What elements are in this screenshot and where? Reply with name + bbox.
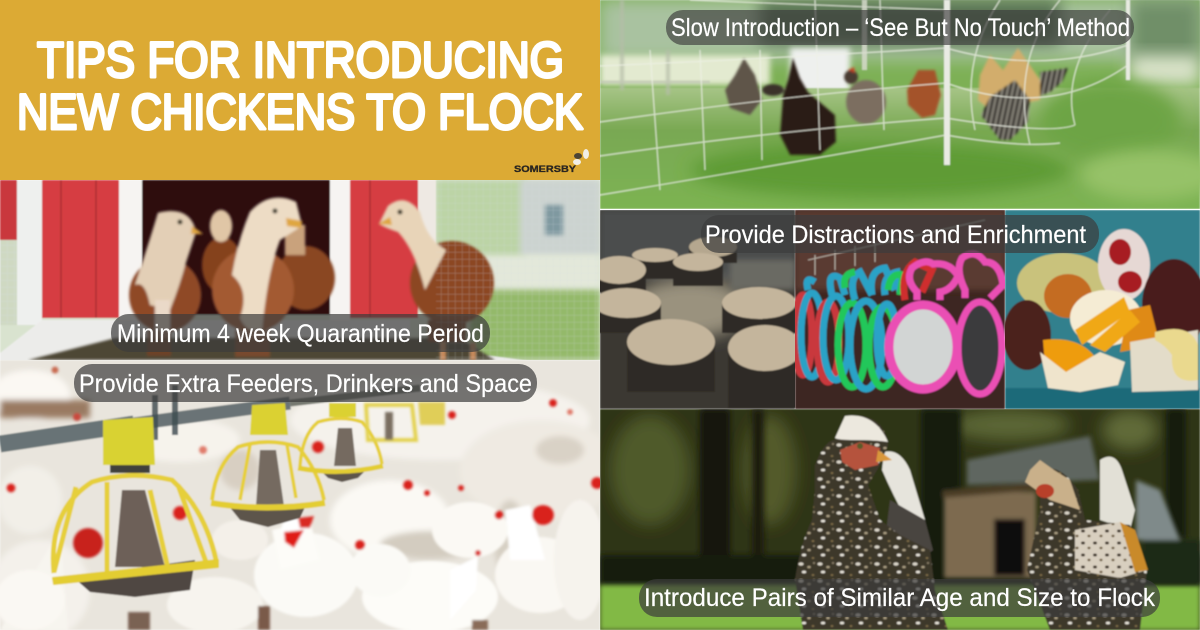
- feeder pipe: [0, 424, 134, 444]
- panel: similar age pairs photo: [600, 409, 1200, 630]
- panel: enrichment stumps photo: [592, 210, 802, 409]
- pink mirrors: [889, 254, 1003, 394]
- feeder small: [298, 403, 383, 482]
- feeder large: [53, 417, 218, 597]
- chick right: [378, 200, 494, 360]
- caption: Quarantine: Minimum 4 week Quarantine Period: [117, 320, 484, 348]
- hen grey brown: [844, 67, 886, 124]
- hen buff pair: [978, 48, 1040, 110]
- hen brown: [907, 70, 941, 118]
- caption: Extra Feeders: Provide Extra Feeders, Drinkers and Space: [79, 370, 532, 398]
- chick back: [202, 210, 242, 293]
- hen black: [780, 58, 836, 155]
- hen striped right: [981, 68, 1068, 140]
- fruit pieces: [1003, 229, 1200, 392]
- caption: Quarantine: [111, 314, 490, 352]
- panel: enrichment mirrors photo: [794, 210, 1005, 409]
- panel: enrichment frozen fruit photo: [1003, 210, 1200, 409]
- chick back right: [277, 225, 335, 310]
- net: [600, 0, 1128, 195]
- birds: [0, 366, 606, 630]
- caption: Distractions and Enrichment: Provide Distractions and Enrichment: [705, 221, 1086, 249]
- pipe bracket: [155, 385, 175, 440]
- stump tops: [592, 237, 802, 371]
- logo: Somersby with bee: SOMERSBY: [514, 164, 576, 174]
- caption: Slow Introduction: Slow Introduction – ‘See But No Touch’ Method: [671, 14, 1130, 42]
- title heading: NEW CHICKENS TO FLOCK: [17, 84, 583, 140]
- blue and green mirrors: [794, 262, 932, 389]
- caption: Similar Age: Introduce Pairs of Similar Age and Size to Flock: [644, 584, 1155, 612]
- title heading: TIPS FOR INTRODUCING: [37, 32, 564, 88]
- stump bodies: [592, 247, 802, 408]
- feeder medium: [211, 403, 325, 527]
- panel: fence photo: [600, 0, 1200, 209]
- background blur of flock: [0, 370, 620, 630]
- panel: quarantine photo: [0, 180, 600, 365]
- feeders far: [366, 402, 445, 440]
- panel: feeders photo: [0, 360, 620, 630]
- chick left: [129, 211, 203, 356]
- hen right: [1025, 457, 1148, 630]
- chicks: [129, 198, 494, 360]
- chick centre: [212, 198, 302, 357]
- title heading: [17, 32, 583, 140]
- logo: Somersby with bee: [514, 149, 589, 174]
- hen left grey: [725, 58, 784, 115]
- hen left: [795, 416, 948, 630]
- shed: [942, 436, 1200, 585]
- title panel: [0, 0, 600, 180]
